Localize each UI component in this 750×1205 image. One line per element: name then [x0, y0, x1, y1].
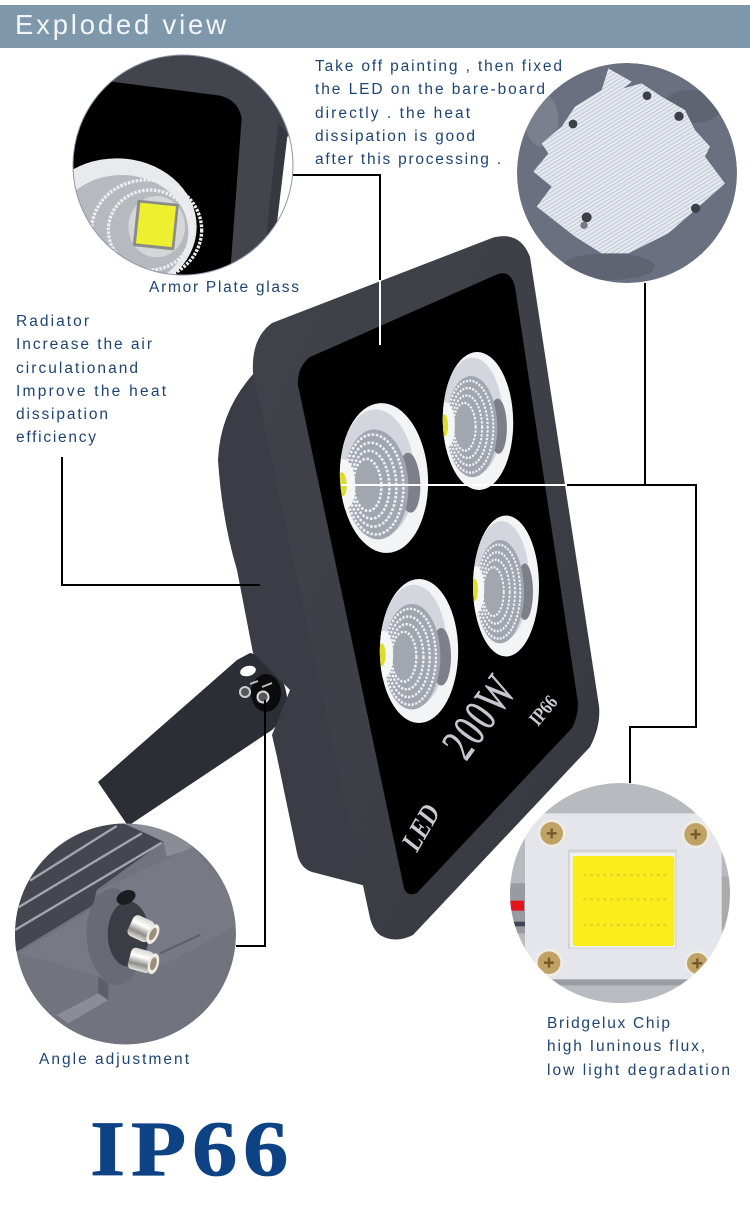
caption: radiator: efficiency [16, 429, 96, 446]
caption: radiator: Increase the air [16, 336, 152, 353]
LED marking: LED [394, 798, 447, 857]
lens bottom right [468, 516, 539, 656]
caption: bare-board LED mounting: the LED on the bare-board [315, 81, 545, 98]
caption: Bridgelux chip: Bridgelux Chip [547, 1015, 670, 1032]
floodlight product photo [98, 236, 599, 939]
mounting bracket [98, 653, 287, 826]
caption: radiator: Improve the heat [16, 383, 167, 400]
caption: bare-board LED mounting: after this processing . [315, 151, 501, 168]
adjustment bolts [239, 664, 281, 712]
caption: armor plate glass: Armor Plate glass [149, 279, 299, 296]
detail circle: COB chip [510, 783, 732, 1007]
front frame [253, 236, 599, 939]
caption: radiator: dissipation [16, 406, 108, 423]
caption: angle adjustment: Angle adjustment [39, 1051, 190, 1068]
caption: radiator: circulationand [16, 360, 138, 377]
lens top right [436, 351, 514, 491]
header banner: Exploded view [15, 9, 226, 40]
detail circle: angle adjustment [13, 823, 240, 1044]
lens bottom left [374, 579, 458, 723]
lens top left [329, 401, 432, 556]
caption: bare-board LED mounting: dissipation is good [315, 128, 475, 145]
caption: Bridgelux chip: high Iuninous flux, [547, 1038, 705, 1055]
IP66 rating title: IP66 [90, 1107, 294, 1193]
caption: Bridgelux chip [547, 1015, 730, 1079]
header banner [0, 5, 750, 48]
rear housing [218, 372, 366, 886]
caption: Bridgelux chip: low light degradation [547, 1062, 730, 1079]
caption: bare-board LED mounting [315, 58, 562, 168]
callout lines [62, 175, 696, 946]
detail circle: bare board [517, 63, 737, 283]
detail circle 1 outline [73, 55, 293, 275]
caption: radiator: Radiator [16, 313, 89, 330]
caption: radiator [16, 313, 167, 446]
caption: bare-board LED mounting: Take off painting , then fixed [315, 58, 562, 75]
black front panel [298, 273, 578, 894]
detail circle: armor plate glass [74, 56, 289, 274]
200W marking: 200W [431, 665, 526, 768]
IP66 marking: IP66 [524, 691, 562, 730]
caption: bare-board LED mounting: directly . the heat [315, 105, 471, 122]
